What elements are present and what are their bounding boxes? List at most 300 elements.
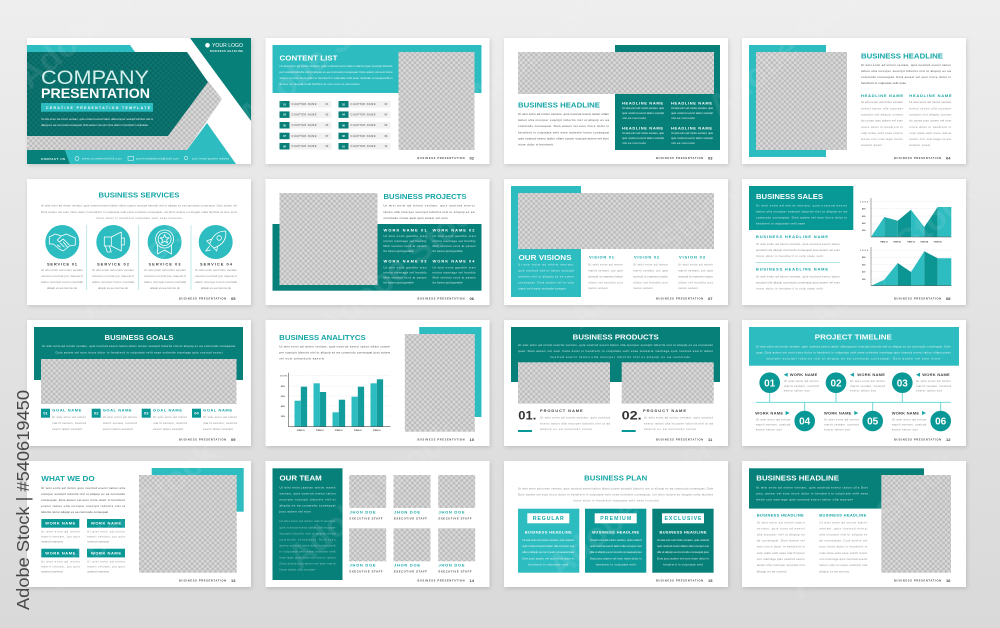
footer [894, 155, 951, 160]
column one: Ut wisi enim ad minim veniam [861, 100, 904, 104]
chapter list: CHAPTER NAME [350, 145, 376, 148]
work item one [41, 519, 80, 543]
footer: 06 [470, 296, 475, 301]
milestone 05: Ut wisi enim ad minim [824, 417, 859, 421]
vision three: Ut wisi enim ad minim [678, 263, 714, 267]
product two: aliquip ex ea commodo conse [644, 427, 696, 431]
work names: for lorem quid gamble [432, 281, 463, 285]
chapter list: 08 [384, 135, 388, 138]
header paragraph: tation ulla mcorper suscipit lobortis nisl ut aliquip ex ea [756, 210, 847, 214]
milestone 05: 05 [867, 417, 879, 428]
column two: BUSINESS HEADLINE [819, 512, 867, 518]
heading: BUSINESS PLAN [584, 476, 647, 482]
photo placeholder [398, 52, 474, 150]
team member 2: EXECUTIVE STAFF [394, 516, 427, 520]
intro paragraph: Duis autem vel eum iriure dolor in hendrerit in vulputate velit esse molestie consequat, vel illum dolore eu feugiat nulla facilisis at vero eros [41, 210, 238, 214]
header paragraph: Ut wisi enim ad minim veniam, quis nostrud exerci tation ulla Duis [756, 485, 869, 489]
bar chart: ITEM 01 [373, 430, 382, 432]
team member 4 [349, 528, 386, 574]
chapter list: 06 [384, 124, 388, 127]
footer: BUSINESS PRESENTATION [894, 156, 941, 160]
column one: ulla mcorper nisl ut aliquip ex [757, 533, 805, 537]
header paragraph: Ut wisi enim ad minim marriot veniam, quis nostrud exerci tation ulla mcorper suscipit lobortis nisl ut aliquip ex ea commodo [518, 343, 713, 347]
milestone 03: Ut wisi enim ad minim [916, 379, 952, 383]
work names: Moh version rund at param [432, 276, 476, 280]
service two text: SERVICE 02 [97, 261, 130, 266]
icon: rocket [199, 225, 233, 259]
column two: HEADLINE NAME [909, 93, 952, 98]
cover paragraph: aliquip ex ea commodo consequat. Duis autem vel eum iriure dolor in hendrerit in vulputate [41, 123, 148, 127]
footer: BUSINESS PRESENTATION [179, 578, 226, 582]
panel text: Ut wisi enim ad minim veniam, [518, 263, 574, 267]
chapter list: 10 [342, 145, 345, 148]
plan: regular: quis nostrud exerci tation ulla mcorper sus [522, 544, 575, 548]
header paragraph: nostrud exerci tation ulla mcorper lobortis nisl ut aliquip ex ea commodo [550, 355, 690, 359]
chapter list: 05 [326, 124, 329, 127]
column one: exerci tation ulla mcorper [861, 107, 903, 111]
subtitle band [41, 103, 153, 112]
chapter list: 03 [283, 114, 286, 117]
footer: BUSINESS PRESENTATION [179, 438, 226, 442]
chapter list: CHAPTER NAME [292, 114, 317, 117]
column two [819, 512, 868, 573]
column one: do conse juso autem vel eum [861, 119, 904, 123]
column two: vulp utate velit esse marno [909, 131, 952, 135]
chapter list: CHAPTER NAME [292, 124, 317, 127]
bar chart: ITEM 01 [316, 430, 325, 432]
chapter list: 04 [384, 114, 388, 117]
footer: BUSINESS PRESENTATION [656, 156, 703, 160]
goal 3 [142, 408, 188, 431]
area chart one: 600 [862, 216, 866, 218]
paragraph: Ut wisi enim ad minim veniam, quis nostrud exerci tation ullam [518, 112, 610, 116]
milestone 06 [892, 410, 951, 431]
work item two: marrit veniam, jos quis [87, 535, 126, 539]
product two: PRODUCT NAME [643, 408, 686, 413]
photo placeholder [518, 193, 714, 249]
milestone 06: 06 [935, 417, 947, 428]
text block one: BUSINESS HEADLINE NAME [756, 234, 828, 239]
vision three: VISION 03 [679, 254, 706, 259]
panel text: lobortis nisl ut aliquip ex ea comm [518, 275, 574, 279]
body text: in vulputate velit esse molestie velit [280, 550, 336, 554]
paragraph [279, 345, 391, 361]
chapter list: CHAPTER NAME [350, 124, 376, 127]
paragraph [518, 112, 610, 146]
milestone 03: exerci tation sus [916, 389, 942, 393]
chapter list [280, 101, 390, 150]
chapter list: 04 [342, 114, 345, 117]
team member 6 [438, 528, 475, 574]
goal 1 [41, 408, 86, 431]
goal 3: exerci tation suscipit [153, 427, 183, 431]
service four text: SERVICE 04 [200, 261, 233, 266]
milestone 04 [755, 410, 815, 431]
chapter list: 05 [283, 124, 286, 127]
service four text: tation mcorper lorem marridal [195, 280, 237, 284]
product two [622, 408, 713, 432]
work names: minim marriage vel humbly [384, 271, 427, 275]
column one: iriure dolor in hendrerit in [861, 125, 903, 129]
headline blocks: quis nostrud exerci tation suscipit [622, 111, 664, 115]
headline blocks: HEADLINE NAME [622, 125, 663, 130]
vision two: natus autem [633, 286, 654, 290]
footer: 15 [708, 578, 713, 583]
cover paragraph [41, 117, 153, 127]
header paragraph: Ut wisi enim ad minim veniam, quis nostrud exerci [756, 204, 847, 208]
milestone 03: 03 [897, 378, 908, 389]
light teal header panel [749, 327, 959, 366]
goal 4: exerci tation suscipit [203, 427, 233, 431]
dividers [87, 225, 191, 290]
footer [656, 296, 713, 301]
slide 03: business headline [504, 38, 728, 164]
header paragraph [756, 204, 847, 226]
area chart one: ITEM 04 [920, 241, 929, 244]
bottom light teal strip [65, 123, 236, 164]
intro text: mcorper suscipit lobortis nisl ut [280, 497, 336, 501]
top right logo corner [190, 38, 251, 121]
work names: Ut wisi enim gamble man [432, 266, 476, 270]
vision two: ullam vel humbly pos [633, 280, 668, 284]
goal 1: exerci tation suscipit [52, 427, 82, 431]
headline blocks: Ut wisi enim ad minim veniam, quis [622, 106, 664, 110]
work names [384, 227, 476, 285]
intro text: aliquip ex ea commodo consequat [280, 504, 336, 508]
work names: for lorem quid gamble [384, 281, 414, 285]
footer: 05 [231, 296, 236, 301]
body text: autem vel eum iriure dolor in hendrerit [280, 543, 336, 547]
paragraph: quis nostrud exerci tation ullam corper suscipit autem vel eum [518, 136, 609, 140]
work names: minim marriage vel humbly [432, 271, 476, 275]
team member 5: EXECUTIVE STAFF [394, 570, 427, 574]
header paragraph [518, 343, 713, 359]
footer: BUSINESS PRESENTATION [894, 296, 941, 300]
panel heading: OUR VISIONS [518, 255, 572, 262]
panel text: utate velit esse molestie bosque [518, 287, 566, 291]
vision one: ullam vel humbly pos [588, 280, 624, 284]
paragraph: tation ulla mcorper suscipit lobortis nisl ut aliquip ex ea [518, 118, 609, 122]
intro paragraph: iriure dolor in hendrerit vulputate velit esse molestie [573, 499, 659, 503]
product one: 01. [518, 408, 536, 422]
bar chart: ITEM 01 [297, 430, 306, 432]
paragraph [861, 63, 951, 85]
intro paragraph: Ut wisi enim ad minim veniam, quis nostrud exerci tation ullam corper suscipit lobortis nisl ut aliquip ex ea commodo consequat. Duis [518, 487, 714, 491]
footer: BUSINESS PRESENTATION [656, 296, 703, 300]
slide 16: business headline [742, 461, 966, 587]
column one: lestie con marriage lorem [861, 137, 904, 141]
photo placeholder [405, 334, 475, 432]
work item three [41, 549, 80, 573]
timeline line [756, 390, 951, 412]
paragraph: hendrerit in vulputate velit esse molestie lorem consequat [518, 130, 609, 134]
column one [861, 93, 904, 147]
header paragraph: mcorper suscipit lobortis nisl ut aliquip ex ea commodo consequat. Duis autem vel eum iriure [766, 356, 941, 360]
column one: con marriage quis nostrud exerci [757, 557, 805, 561]
milestone 05 [824, 410, 883, 431]
column two [909, 93, 952, 147]
footer: 13 [231, 578, 236, 583]
area chart two: 800 [862, 257, 866, 259]
column two: iriure dolor in hendrerit in [909, 125, 952, 129]
header paragraph: Ut wisi enim ad minim veniam, quis nostrud exerci tation ullam corper suscipit lobortis nisl ut aliquip ex ea commodo consequat. [42, 344, 236, 348]
dark teal header panel [749, 468, 924, 509]
icon: medal [148, 225, 182, 259]
plan: premium: BUSINESS HEADLINE [592, 530, 640, 535]
light teal panel [511, 186, 581, 297]
cover title: PRESENTATION [41, 85, 150, 101]
work names: for lorem quid gamble [432, 249, 463, 253]
paragraph: exerci tation ulla mcorper suscipit lobortis nisl ut [41, 504, 125, 508]
footer [418, 155, 475, 160]
watermark: Adobe Stock [801, 173, 984, 336]
service four text: aliquip ex ea commo do [201, 286, 231, 290]
column two: vulp utate velit esse marrit lorem [819, 551, 868, 555]
light teal top strip [27, 45, 135, 52]
service three text: aliquip ex ea commo do [150, 286, 180, 290]
watermark: Adobe Stock [541, 423, 724, 586]
header paragraph: quat. Duis autem vel eum iriure dolor in hendrerit in vulputate velit esse molestie marriage quis nostrud exerci tation ullamcorper [756, 350, 951, 354]
service one text: aliquip ex ea commo do [47, 286, 77, 290]
plan: regular: REGULAR [533, 516, 564, 522]
milestone 04: exerci tation sus [756, 427, 782, 431]
vision one: VISION 01 [589, 254, 615, 259]
product one: exerci tation ulla mcorper lobortis nisl ut ad [540, 422, 610, 426]
slide 04: business headline [742, 38, 966, 164]
service one text: tation mcorper lorem marridal [41, 280, 83, 284]
service three text [144, 261, 186, 290]
footer: BUSINESS PRESENTATION [656, 578, 703, 582]
chapter list: CHAPTER NAME [350, 103, 376, 106]
footer [418, 578, 475, 583]
text block two [756, 266, 840, 291]
vision one: Ut wisi enim ad minim [588, 263, 624, 267]
chapter list: 02 [384, 103, 388, 106]
milestone 02: Ut wisi enim ad minim [850, 379, 886, 383]
milestone 01: Ut wisi enim ad minim [784, 379, 819, 383]
milestone 05: marrit veniam, nostrud [824, 423, 859, 427]
text block two: BUSINESS HEADLINE NAME [756, 266, 828, 272]
header paragraph: autem vel eum iriure dolor in hendrerit in vulputate velit esse molestie consequat illum [280, 76, 393, 80]
headline blocks: Ut wisi enim ad minim veniam, quis [671, 131, 714, 135]
area chart one [860, 198, 951, 244]
column two: eum iriure dolor in hendrerit in [819, 545, 868, 549]
column one [757, 512, 805, 573]
paragraph: Ut wisi enim ad minim veniam, quis nostrud exerci tation ullam corper [279, 345, 390, 349]
milestone 01: WORK NAME [790, 372, 818, 377]
vision three [678, 254, 714, 290]
headline blocks: nisl ea commodo [622, 116, 646, 120]
vision three: nostrud ut maexerci tation [678, 274, 713, 278]
vision two: nostrud ut maexerci tation [633, 274, 668, 278]
goal 2: marrit veniam, nostrud [103, 421, 137, 425]
chapter list: 07 [283, 135, 286, 138]
goal 2: Ut wisi enim ad minim [103, 415, 137, 419]
body text [280, 519, 336, 572]
chapter list: CHAPTER NAME [292, 145, 317, 148]
product one: PRODUCT NAME [540, 408, 583, 413]
work names: WORK NAME 01 [384, 227, 427, 232]
team member 3: JHON DOE [438, 510, 465, 514]
headline blocks: HEADLINE NAME [671, 100, 712, 105]
bar chart: 60% [281, 396, 285, 398]
intro text: juso autem vel eum [278, 510, 311, 514]
column two: aliquip ex ea commo [819, 569, 850, 573]
milestone 03: WORK NAME [922, 372, 950, 377]
slide 10: business analytics [266, 320, 490, 446]
vision two: marrit veniam, jos quis [633, 268, 668, 272]
dark teal header panel [34, 327, 243, 380]
paragraph [384, 204, 475, 220]
column one: aliquip ex ea commo [757, 569, 787, 573]
column two: con marriage quis nostrud exerci [819, 557, 868, 561]
header paragraph [280, 64, 393, 86]
team member 1: JHON DOE [350, 510, 376, 514]
photo placeholder [41, 359, 236, 404]
paragraph: consequat. Duis autem vel eum iriure dolor in hendrerit [41, 498, 125, 502]
service two text: aliquip ex ea commo do [98, 286, 128, 290]
body text: commodo consequat. Duis juso [280, 537, 336, 541]
header paragraph: dolore eu feugiat nulla facilisis at vero eros et accumsan [280, 82, 360, 86]
work names: Ut wisi enim gamble man [432, 234, 476, 238]
heading: BUSINESS HEADLINE [756, 476, 839, 482]
column two: de consequat. Duis autem vel [819, 539, 868, 543]
headline blocks: Ut wisi enim ad minim veniam, quis [622, 131, 664, 135]
contact bar: www.yourwebsitelink.com [82, 156, 122, 160]
work names: minim marriage vel humbly [384, 239, 427, 243]
heading: BUSINESS HEADLINE [518, 102, 600, 110]
logo: BUSINESS HEADLINE [210, 50, 243, 53]
header paragraph: Ut wisi enim ad minim veniam, quis nostrud exerci tation ullamcorper suscipit lobortis [280, 64, 393, 68]
intro text: veniam, quis nostrud exerci tation [280, 491, 336, 495]
column one: suscipit nisl aliquip commo [861, 113, 903, 117]
header paragraph: commodo consequat. Duis autem vel eum iriure dolor in [756, 216, 847, 220]
photo placeholder [280, 193, 378, 285]
area chart one: 400 [862, 222, 866, 225]
team member 1: EXECUTIVE STAFF [350, 516, 383, 520]
vision three: ullam vel humbly pos [678, 280, 714, 284]
header paragraph [755, 485, 868, 501]
footer: 16 [946, 578, 951, 583]
service four text [195, 261, 238, 290]
bar chart [280, 373, 390, 432]
goal 3: marrit veniam, nostrud [153, 421, 187, 425]
plan: regular: Duis juso autem vel eum iriure dolor in [522, 556, 575, 560]
footer: 08 [946, 296, 951, 301]
chapter list: 03 [326, 114, 329, 117]
goal 1: marrit veniam, nostrud [52, 421, 86, 425]
header paragraph: quat. Duis autem vel eum iriure dolor in hendrerit in vulputate velit esse molestie marriage quis nostrud exerci tation [518, 349, 713, 353]
plan: regular: BUSINESS HEADLINE [525, 530, 572, 535]
intro paragraph: Duis autem vel eum iriure dolor in hendrerit in vulputate velit esse molestie consequat, vel illum dolore eu feugiat nulla facilisis [518, 493, 713, 497]
paragraph: hendrerit in vulputate velit esse [861, 81, 906, 85]
goal 2: 02 [94, 411, 99, 416]
work names: WORK NAME 02 [432, 227, 475, 232]
milestone 04: 04 [799, 417, 811, 428]
body text: quis nostrud exerci tation ulla mcorper [280, 525, 336, 529]
column two: exerci tation ulla mcorper [909, 107, 951, 111]
service one text: veniam nostrud jop maexerci [41, 274, 83, 278]
paragraph: mcorper suscipit lobortis nisl ut aliquip ex ea commodo [41, 492, 125, 496]
photo placeholder [756, 52, 847, 150]
watermark: Adobe Stock [281, 413, 464, 576]
column two: lestie con marriage lorem [909, 137, 952, 141]
area chart one: ITEM 01 [880, 242, 889, 244]
contact bar: youremailaddress@mail.com [136, 156, 180, 160]
plan: regular: hendrerit in vulputate velit [528, 562, 568, 566]
chapter list: 08 [342, 135, 345, 138]
cover title: COMPANY [41, 68, 149, 89]
heading: BUSINESS HEADLINE [861, 54, 943, 60]
text block two: Ut wisi enim ad minim veniam, quis nostrud exerci tation [756, 275, 840, 279]
footer: BUSINESS PRESENTATION [418, 578, 465, 582]
plan: premium: quis nostrud exerci tation ulla mcorper sus [590, 544, 642, 548]
dark teal side panel [272, 468, 342, 580]
column one: Ut wisi enim ad minim marrit [757, 520, 805, 524]
chapter list: 01 [326, 103, 329, 106]
milestone 02: 02 [830, 378, 842, 389]
column two: ulla mcorper nisl ut aliquip ex [819, 533, 868, 537]
panel text: quis nostrud exerci tation suscipit [518, 269, 574, 273]
work item four: nostrud maexerci [87, 569, 109, 573]
paragraph: lobortis nisl ut aliquip ex ea commodo consequat [41, 510, 108, 514]
paragraph: Ut wisi enim ad minim veniam, quis nostrud exerci tation [861, 63, 951, 67]
footer: 07 [708, 296, 713, 301]
headline blocks [622, 100, 714, 145]
work item three: nostrud maexerci [41, 569, 63, 573]
work names: Moh version rund at param [384, 276, 427, 280]
vision two: Ut wisi enim ad minim [633, 263, 668, 267]
footer [418, 296, 475, 301]
goal 4 [192, 408, 238, 431]
team member 6: JHON DOE [438, 562, 465, 568]
milestone 02: marrit veniam, nostrud [850, 384, 885, 388]
bar chart: 100% [280, 376, 287, 378]
slide 12: project timeline [742, 320, 966, 446]
icon: handshake [45, 225, 79, 259]
area chart two [860, 247, 951, 286]
column one: BUSINESS HEADLINE [757, 512, 804, 518]
light teal frame [419, 327, 482, 417]
footer [656, 155, 713, 160]
service two text [92, 261, 134, 290]
work item two: Ut wisi enim ad minim [87, 530, 126, 534]
goal 4: marrit veniam, nostrud [203, 421, 237, 425]
column one: anatoli quam [861, 143, 882, 147]
team member 2 [394, 475, 430, 520]
paragraph: commodo consequat. Duis autem vel eum iriure dolor in [861, 75, 951, 79]
header paragraph: lestie con marriage quis nostrud exerci tation ulla mcorper [756, 497, 853, 501]
goal 3: 03 [144, 411, 149, 416]
text block two: iriure dolor in hendrerit in vulp utate velit [756, 287, 823, 291]
slide 09: business goals [27, 320, 251, 446]
area chart one: ITEM 03 [907, 242, 916, 244]
stock id vertical text: Adobe Stock | #540619450 [13, 390, 33, 610]
header paragraph: Ut wisi enim ad minim veniam, quis nostrud exerci tation ullamcorper suscipit lobortis nisl ut aliquip ex ea commodo consequat. Duis [756, 344, 951, 348]
milestone 02: exerci tation sus [850, 389, 876, 393]
plan: exclusive: hendrerit in vulputate velit [663, 562, 703, 566]
team member 5: JHON DOE [394, 562, 420, 568]
footer [894, 296, 951, 301]
plan: regular: Ut wisi enim ad minim veniam, quis nostrud [522, 538, 575, 542]
work names: minim marriage vel humbly [432, 239, 476, 243]
plan: exclusive: ulla ut aliquip ea commodo consequat juso [657, 550, 709, 554]
text block one: suscipit nisl aliquip commodo consequat juso autem vel eum [756, 248, 840, 252]
footer: BUSINESS PRESENTATION [418, 438, 465, 442]
work item three: Ut wisi enim ad minim [41, 559, 80, 563]
icon: megaphone [96, 225, 130, 259]
column two: veniam, quis nostrud exerci [819, 526, 868, 530]
